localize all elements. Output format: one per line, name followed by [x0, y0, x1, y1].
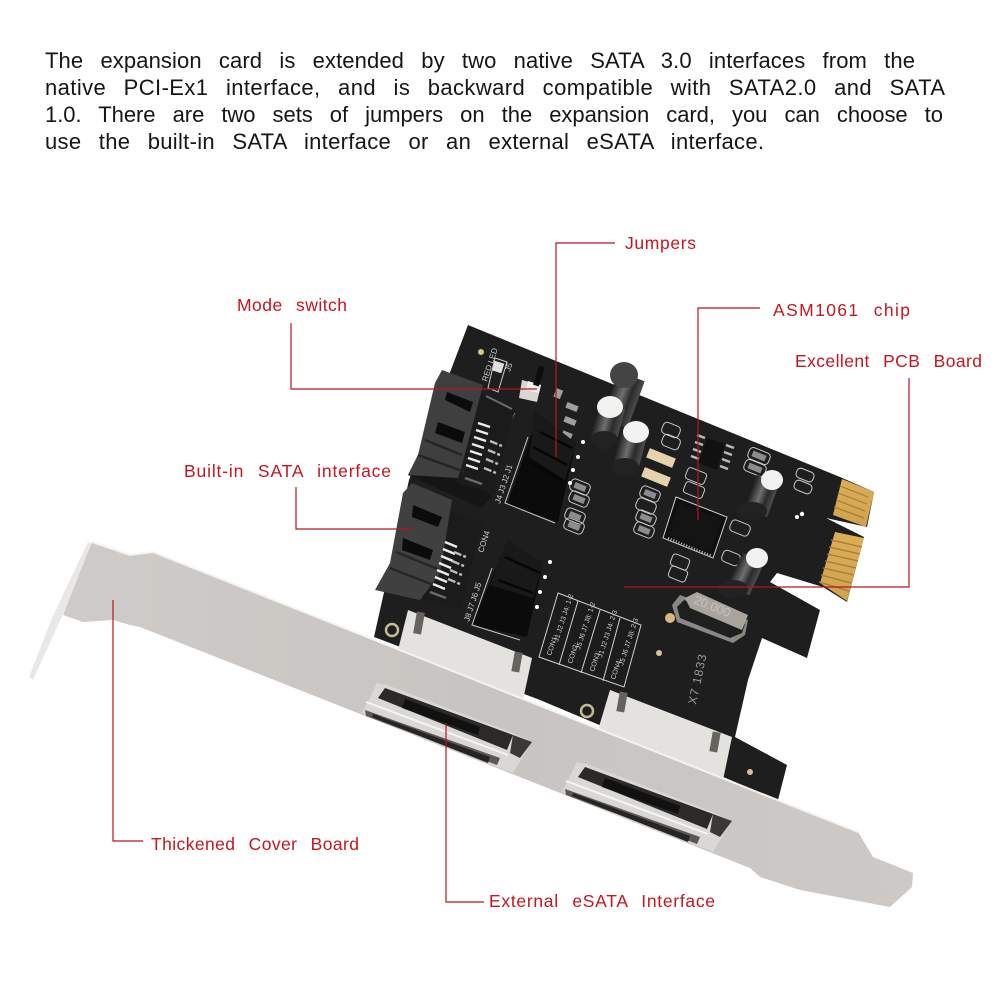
eSATA port 1 — [362, 683, 532, 773]
capacitors — [590, 362, 783, 598]
SATA connector 2 — [375, 483, 482, 610]
silkscreen component footprints — [462, 347, 815, 623]
callout: Built-in SATA interface: Built-in SATA interface — [184, 461, 391, 481]
text block: intro paragraph: use the built-in SATA interface or an external eSATA interface. — [45, 129, 764, 154]
jumper setting table: J1 J2 J3 J4: 2-3 — [597, 609, 619, 659]
cover bracket — [29, 542, 913, 907]
mode switch — [519, 366, 545, 402]
PCB board — [374, 325, 874, 800]
callout: Mode switch — [237, 295, 537, 389]
crystal oscillator — [665, 592, 748, 643]
silkscreen component footprints: J5 — [503, 361, 515, 373]
silkscreen component footprints: J4 J3 J2 J1 — [493, 463, 515, 505]
callout: Excellent PCB Board — [624, 351, 982, 587]
callout: Thickened Cover Board — [113, 600, 359, 854]
silkscreen component footprints: CON4 — [476, 529, 492, 554]
jumper setting table — [539, 593, 641, 687]
ASM1061 chip — [663, 497, 727, 558]
text block: intro paragraph: native PCI-Ex1 interface, and is backward compatible with SATA2.0 and SATA — [45, 75, 945, 100]
regulator IC — [691, 435, 734, 470]
callout: ASM1061 chip: ASM1061 chip — [773, 300, 910, 320]
silkscreen component footprints: RED LED — [480, 347, 500, 383]
SATA connector 1 — [408, 370, 515, 508]
callout: Built-in SATA interface — [184, 461, 411, 529]
jumper setting table: J5 J6 J7 J8: 1-2 — [575, 601, 597, 651]
jumper setting table: CON4: — [610, 658, 624, 681]
jumper setting table: CON2: — [567, 642, 581, 665]
jumper setting table: J5 J6 J7 J8: 2-3 — [618, 617, 640, 667]
text block: intro paragraph: The expansion card is extended by two native SATA 3.0 interfaces from the — [45, 48, 915, 73]
text block: intro paragraph — [45, 48, 945, 154]
silkscreen component footprints: CON2 — [501, 410, 517, 435]
jumpers — [472, 410, 576, 640]
callout: External eSATA Interface — [446, 723, 715, 911]
vias — [478, 349, 753, 775]
jumper setting table: J1 J2 J3 J4: 1-2 — [553, 593, 575, 643]
callout: ASM1061 chip — [698, 300, 910, 520]
illustration: PCIe expansion card — [29, 325, 913, 907]
eSATA port 2 — [562, 762, 732, 852]
callout: External eSATA Interface: External eSATA Interface — [489, 891, 715, 911]
callout: Mode switch: Mode switch — [237, 295, 347, 315]
callout: Jumpers: Jumpers — [625, 233, 696, 253]
crystal oscillator: 20.000 — [692, 593, 733, 620]
callout: Thickened Cover Board: Thickened Cover Board — [151, 834, 359, 854]
callout: Excellent PCB Board: Excellent PCB Board — [795, 351, 982, 371]
jumper setting table: CON1: — [546, 634, 560, 657]
gold fingers — [819, 479, 874, 601]
jumper setting table: CON3: — [589, 650, 603, 673]
text block: intro paragraph: 1.0. There are two sets of jumpers on the expansion card, you can choose to — [45, 102, 943, 127]
silver shields behind bracket — [386, 610, 732, 780]
callout: Jumpers — [556, 233, 696, 457]
silkscreen component footprints: J8 J7 J6 J5 — [462, 581, 484, 623]
board code: X7 1833 — [685, 652, 710, 706]
